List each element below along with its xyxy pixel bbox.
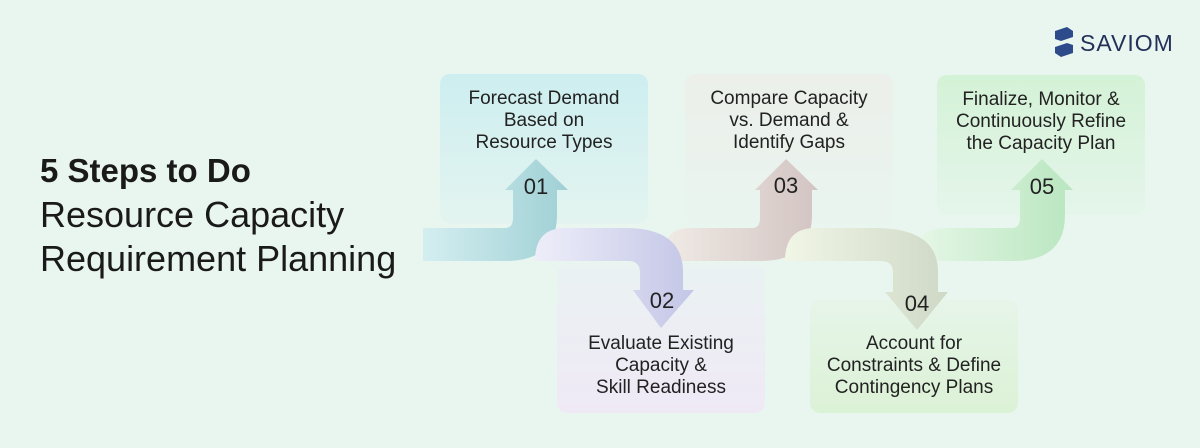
panel: step 5: Continuously Refine [956,111,1126,132]
number 03: 03 [774,173,798,198]
panel: step 2 [557,263,765,413]
panel: step 4: Account for [866,333,962,354]
panel: step 3 [685,74,893,224]
panel: step 5 [937,75,1145,215]
panel: step 2: Capacity & [615,355,707,376]
panel: step 1: Resource Types [476,132,612,153]
title: Resource Capacity [40,194,344,235]
panel: step 3: Identify Gaps [733,132,845,153]
arrow 2 [535,228,694,328]
number 04: 04 [905,291,929,316]
panel: step 1 [440,74,648,224]
panel: step 4: Contingency Plans [835,377,993,398]
arrow 5 [915,159,1073,261]
panel: step 3: vs. Demand & [729,110,849,131]
panel: step 4: Constraints & Define [827,355,1001,376]
logo: SAVIOM: SAVIOM [1080,30,1174,56]
panel: step 3: Compare Capacity [710,88,868,109]
number 02: 02 [650,288,674,313]
arrow 3 [662,159,818,261]
title: Requirement Planning [40,238,396,279]
title [40,152,396,279]
number 01: 01 [524,174,548,199]
title: 5 Steps to Do [40,152,251,189]
arrow 1 [423,159,568,261]
panel: step 5: Finalize, Monitor & [962,89,1120,110]
number 05: 05 [1030,174,1054,199]
panel: step 2: Evaluate Existing [588,333,734,354]
panel: step 1: Forecast Demand [468,88,620,109]
panel: step 5: the Capacity Plan [967,133,1115,154]
panel: step 1: Based on [504,110,584,131]
panel: step 2: Skill Readiness [596,377,726,398]
logo: SAVIOM [1055,27,1174,57]
panel: step 4 [810,300,1018,413]
arrow 4 [785,228,948,330]
